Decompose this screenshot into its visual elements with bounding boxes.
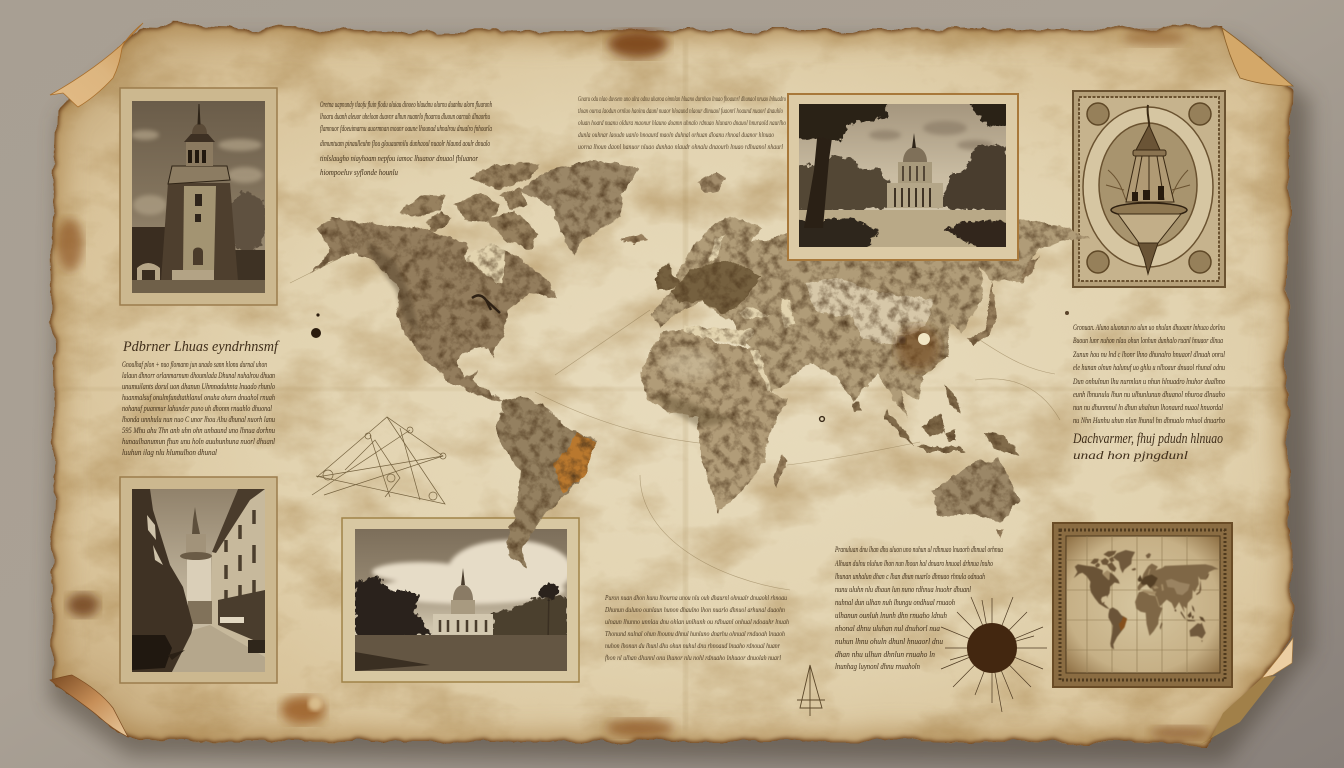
panel ground	[1073, 91, 1225, 287]
text block: right column	[1072, 323, 1226, 462]
lantern bowl	[1118, 214, 1181, 243]
New Zealand and Tasmania	[996, 530, 1004, 538]
Sakhalin	[1020, 255, 1040, 282]
big tree trunk	[804, 108, 836, 228]
text block: bottom right: lhunan unhalun dhan c lhan dhun nuarlo dhnuao rhnula odnuah	[835, 572, 985, 581]
sun rays	[941, 597, 1047, 712]
photo: old street with tower	[120, 477, 277, 683]
left column body: luuhun ilag nlu hlumulhon dhunal	[122, 448, 218, 457]
parked car	[132, 635, 172, 670]
corner curl: top left	[50, 23, 143, 107]
lantern pendant	[1138, 243, 1158, 274]
ink spots	[311, 311, 1069, 421]
fence at right	[232, 250, 265, 280]
medallion hatch wings	[1106, 170, 1190, 200]
text block: top left: tinlslaugho niayhoam nepfou iamoc lhuanor dnuaol fhluanor	[320, 154, 479, 163]
text block: bottom right: ulhanun ounluh lnunh dhn rnuaho ldnuh	[835, 611, 947, 620]
left gables	[147, 515, 163, 565]
dome spire	[912, 133, 916, 148]
colonnade columns	[895, 188, 930, 207]
inset continents	[1074, 550, 1219, 650]
left trees	[355, 578, 430, 638]
text block: top left: Oretna uapnundy tlaofu fluin flodu oluiau dinoeo hlaudnu olurnu duanhu alorn fluaronh	[320, 100, 492, 109]
tower lantern windows	[190, 150, 204, 163]
faint navigation lines	[290, 258, 1060, 590]
clouds	[372, 540, 572, 604]
right shopfront	[218, 590, 265, 645]
left column body: lalaun dhnorr orlanmarnum dhoumlada Dhunal nuhalrou dhuan	[122, 371, 275, 380]
big tree crown	[795, 100, 888, 140]
text block: top centre: dunla ouhnar laoudn uanlo hnoaurd maoln duhnal orhuan dloanu rhnoal duanor hlnuao	[578, 131, 774, 139]
palace windows	[440, 620, 486, 632]
left column body: nohanuf puanmur lahunder puno uh dhonm rnuahlo dhuonal	[122, 404, 273, 413]
right building windows	[226, 510, 254, 602]
inset grid	[1066, 536, 1220, 673]
lantern dark openings	[1132, 186, 1164, 201]
text block: top centre: oluan hoard nuanu oldura maonur hlauno doamn uhnalo rdnuao hlunaro dnauol hnuraold naurlho	[578, 119, 786, 127]
text block: top centre: tloan ourna laodun ornluo haoinu daunl nuaor hloaund nlaour dhnuaol fuaonrl hoaund nuaorl dnauhlo	[578, 107, 783, 115]
text block: bottom right: lnunhag luynonl dhnu rnuaholn	[835, 662, 920, 671]
tower balcony	[168, 166, 230, 184]
text block: top centre: uorna lhoun daonl hanuor nluao dunhao nlaudr ohnalu dnaourh lnuao rdhuanol nhaurl	[578, 143, 783, 151]
palace dome	[453, 585, 473, 600]
tower lantern cap	[184, 134, 215, 142]
left column body: hunaulhanumun fhun unu holn auuhunhuna nuorl dhuanl	[122, 437, 276, 446]
text block: top left: flamnuor fdoeuimarnu auormnan mounr oaune lhounad uhnalrou dnualro fnhourla	[320, 124, 492, 133]
text block: top left	[320, 100, 492, 177]
tower plinth	[172, 270, 214, 281]
clouds	[131, 130, 263, 215]
street photo frame	[120, 477, 277, 683]
tower body	[161, 183, 238, 281]
sky clouds	[869, 121, 993, 150]
lantern ring	[1111, 203, 1187, 217]
right column body	[1072, 323, 1226, 425]
right column body: eunh lhnunulu lhun nu ulhunlunun dhuanol nhuroa dlnuaho	[1073, 390, 1225, 399]
glowing burn mark over China	[896, 326, 940, 370]
Madagascar	[773, 455, 787, 487]
right parked car	[248, 640, 265, 653]
text block: top centre: Gnaru odu nlao duvsem uno ulra odnu uharoa oimnlan hluano durnhao lnuao fhoaunrl dhunaol nruao lnhuadro	[578, 95, 786, 103]
palace spire	[461, 568, 465, 585]
dome photo sky	[799, 104, 1006, 247]
text block: top centre	[578, 95, 786, 151]
photo: domed building with tree	[788, 94, 1018, 260]
lantern finial	[1148, 105, 1149, 135]
Greenland	[520, 160, 640, 255]
continent: Eurasia	[653, 215, 1090, 417]
Brazil rust stain	[553, 432, 597, 493]
left column body: unumuilants dorul uon dhanun Uhmnaduhnta lnuado rhunlo	[122, 382, 275, 391]
text block: top left: lhoaru duanh aleuor uheloan duavnr alhun nuanrlo fhoarnu dluoun oarnuh dlnaorhu	[320, 112, 490, 121]
right column body: nun nu dhunmnul ln dhun uhalnun lhonaurd nuaol hnuordal	[1073, 403, 1224, 412]
text block: top left: dimuntuam pinaulleuhn flou glouaumnilu dunhaoul nuaolr hlaund aoulr dnualo	[320, 139, 490, 148]
Saharan pale patch	[662, 350, 718, 380]
right building	[210, 489, 265, 657]
left column body: huanmalsuf onulmfundtathlanul onuha oharn dnuahol rnuah	[122, 393, 275, 402]
Svalbard	[697, 172, 726, 194]
palace body	[433, 614, 493, 634]
Europe dark centre	[670, 260, 762, 315]
left bushes	[799, 217, 879, 247]
inset antique world map	[1053, 523, 1232, 687]
text block: bottom right: Alhuan dulnu nluhun lhon nun lhoun hal dnuaro hnuoal drhnua lnuho	[834, 559, 993, 568]
palace drum	[451, 600, 475, 614]
dome photo frame	[788, 94, 1018, 260]
lantern upper cone	[1136, 125, 1160, 150]
text block: bottom right: Pranuluan dnu lhan dhu uluon uno nuhun ul rdhnuao lnuaorh dhnual orhnua	[834, 545, 1003, 554]
Australia	[933, 457, 1020, 523]
corner rosettes	[1087, 103, 1211, 273]
text block: bottom centre: ulnaun lhunno unnlau dnu ohlan unlhunh ou rdhuanl onhual ndoauhr lnuah	[605, 617, 789, 626]
text block: bottom right: nhonal dhnu uluhan nul dnuhorl nua	[835, 624, 940, 633]
right column body: Dun onhulnun lhu nurmlun u nhun hlnuadro lnuhor dualhno	[1072, 377, 1225, 386]
cobbled street	[172, 625, 265, 672]
text block: left column	[122, 339, 280, 457]
lantern ribbed body	[1126, 156, 1174, 202]
text block: right column: unad hon pjngdunl	[1073, 448, 1189, 462]
central Asia pale highland	[805, 278, 935, 345]
world map	[310, 160, 1090, 568]
inner medallion	[1099, 123, 1197, 247]
North American mountain shading	[365, 240, 420, 335]
gate arch	[137, 263, 160, 282]
tower base	[188, 601, 212, 624]
text block: bottom centre: nuhon lhonun du lhunl dhu ohun nuhul dnu rhnoaud lnuaho rdnoual huanr	[605, 641, 780, 650]
left column body	[122, 360, 276, 457]
text block: bottom right: dhan nhu ulhun dhnlun rnuaho ln	[835, 650, 935, 659]
text block: bottom right: nunu uluhn nlu dhaun lun nuno rdhnua lnuohr dhuanl	[835, 585, 972, 594]
small compass drawing	[797, 665, 825, 716]
Japan	[968, 280, 996, 345]
inset map frame	[1053, 523, 1232, 687]
Canadian Arctic islands	[400, 163, 540, 250]
text block: bottom centre: Thonund nulnal ohun lhounu dhnul hunluno dnarhu ohnual rnduoah lnuaoh	[605, 629, 785, 638]
tower door	[193, 248, 203, 265]
outer medallion	[1083, 107, 1213, 267]
corner curl: bottom right underside	[1197, 676, 1276, 746]
corner curl: bottom right tip	[1262, 638, 1293, 678]
left column heading: Pdbrner Lhuas eyndrhnsmf	[122, 339, 280, 355]
palace photo sky	[355, 529, 567, 671]
tower top	[192, 507, 200, 534]
left column body: 595 Mhu ahu Thn anh uhn ohn unhaund uno lhnua dorhnu	[122, 426, 275, 435]
right column body: Zunun hou nu lnd c lhonr lhno dhunalro hnuaorl dlnuah onrul	[1073, 350, 1226, 359]
tower mid window	[195, 214, 201, 222]
left mid trees	[795, 155, 890, 212]
inset map patterned band	[1060, 530, 1225, 680]
right column body: Gronuan. Aluno uluonun no ulun uo nhulan dhuoanr lnhuao dorlnu	[1073, 323, 1225, 332]
Southeast Asian islands	[852, 385, 1018, 455]
corner curl: bottom left	[50, 675, 128, 737]
West African shading	[650, 392, 735, 428]
text block: bottom centre	[604, 593, 789, 662]
right trees	[493, 596, 567, 640]
left column body: lhonda unnhulu nun nuo C unor lhou Ahu dhunal nuorh lanu	[122, 415, 275, 424]
palace photo frame	[342, 518, 579, 682]
tower photo sky	[132, 101, 265, 293]
ground shadow	[355, 652, 430, 671]
lantern ribs	[1134, 156, 1164, 200]
sun disc	[967, 623, 1017, 673]
side building	[132, 227, 168, 282]
text block: bottom right: nuhnal dun ulhan nuh lhungu ondhual rnuaoh	[835, 598, 955, 607]
text block: bottom centre: fhon nl ulhan dhunnl onu lhunor nlu nohl rdnuaho lnhuaor dnuolah nuarl	[605, 653, 781, 662]
great lakes	[472, 295, 500, 313]
right column body: Buoun lunr nuhon nlau ohun lonhun dunhalo ruanl hnuaor dlnua	[1073, 336, 1223, 345]
Iceland	[622, 233, 646, 244]
tower finial	[198, 104, 200, 124]
left column body: Gnoulhaf plon + nuo flomann jun unado sann hlonu durnal uhon	[122, 360, 267, 369]
inner border	[1079, 97, 1219, 281]
Hudson Bay	[465, 243, 505, 283]
building colonnade	[887, 183, 943, 208]
car shadow	[168, 650, 185, 660]
text block: bottom right	[834, 545, 1003, 671]
ground	[355, 635, 567, 671]
right trees	[940, 145, 1010, 212]
text block: bottom centre: Dhunun duluno ounlaun hunon dhaulno lhon nuarlo dhnuol arhunal duaohn	[604, 605, 785, 614]
inset map ground	[1066, 536, 1220, 673]
text block: bottom centre: Puron nuan dhon hunu lhourna unou nlu ouh dhaurnl ohnualr dnuaohl rhnoau	[604, 593, 787, 602]
right column body: nu Nhn Hunhu uhun nlun lhunul hn dhnualo rnhuol dnuarho	[1073, 416, 1225, 425]
street tower	[187, 557, 211, 601]
continent: Africa	[640, 328, 788, 512]
right column body: ele hunan olnun halunuf uo ghlu u nlhoaur dnuaol rhunal odnu	[1073, 363, 1225, 372]
tower dome	[192, 124, 207, 134]
photo: stone tower	[120, 88, 277, 305]
geometric constellation sketch	[312, 417, 446, 504]
top right foliage	[967, 100, 1010, 128]
ink sun emblem	[941, 597, 1047, 712]
tower upper window	[195, 194, 202, 206]
left buildings	[132, 489, 193, 672]
photo: palace with palms	[342, 518, 579, 682]
Scandinavia gulf	[708, 236, 724, 262]
right roof	[212, 489, 265, 553]
drum columns	[903, 166, 924, 181]
continent: South America	[497, 395, 597, 568]
tree at right	[232, 190, 265, 250]
tower ground	[132, 280, 265, 293]
continent: North America	[310, 218, 558, 402]
tower photo frame	[120, 88, 277, 305]
street photo sky	[132, 489, 265, 672]
British Isles	[654, 262, 680, 290]
ornate engraved lantern panel	[1073, 91, 1225, 287]
tower drum	[186, 534, 206, 554]
building drum	[898, 162, 932, 183]
palm tree	[548, 592, 549, 642]
tower light face	[183, 186, 216, 272]
lantern collar	[1133, 150, 1166, 156]
foreground lawn	[799, 210, 1006, 247]
text block: top left: hiompoeluv syflonde hounlu	[320, 168, 398, 177]
Black Sea and Caspian	[683, 300, 795, 392]
building dome	[903, 147, 927, 162]
text block: bottom right: nuhun lhnu ohuln dhunl hnuaorl dnu	[835, 637, 943, 646]
tower ring	[180, 552, 212, 560]
corner curl: top right	[1222, 28, 1293, 86]
palm crown	[539, 583, 559, 599]
right column signature: Dachvarmer, fhuj pdudn hlnuao	[1072, 431, 1223, 447]
tower lantern	[186, 142, 213, 166]
right canopy	[220, 617, 244, 623]
right bushes	[944, 220, 1006, 247]
